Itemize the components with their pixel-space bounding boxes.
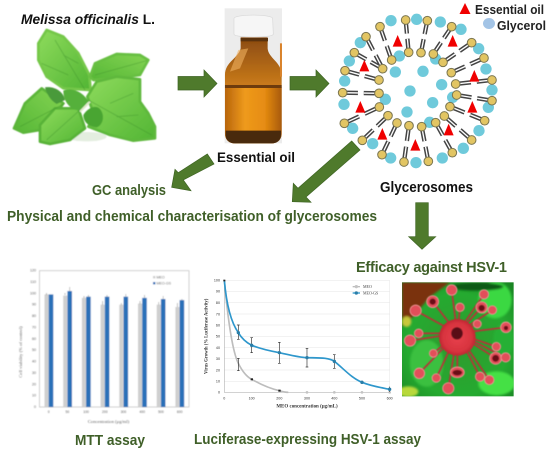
chart legend: MEO xyxy=(156,276,165,280)
bar chart: MTT cell viability: 90 xyxy=(32,303,36,307)
icon: lemon balm leaves xyxy=(14,30,155,144)
bar chart: MTT cell viability: 500 xyxy=(158,410,164,414)
heading: Luciferase-expressing HSV-1 assay: Luciferase-expressing HSV-1 assay xyxy=(194,432,421,448)
arrow: oil to GC analysis xyxy=(172,154,214,191)
bar chart: MTT cell viability: 50 xyxy=(66,410,69,414)
bar chart: MTT cell viability: 10 xyxy=(32,394,36,398)
chart legend: MEO-GS xyxy=(363,290,378,295)
line chart: virus growth: 90 xyxy=(216,290,220,294)
line chart: virus growth: 70 xyxy=(216,312,220,316)
essential oil triangles xyxy=(355,35,479,151)
line chart: virus growth: MEO concentration (µg/mL) xyxy=(276,405,338,410)
line chart: virus growth: 80 xyxy=(216,301,220,305)
label: glycerosomes: Glycerosomes xyxy=(380,180,473,196)
MEO-GS curve xyxy=(224,280,390,389)
chart legend: MEO-GS xyxy=(156,282,172,286)
bar chart: MTT cell viability: 60 xyxy=(32,337,36,341)
bar chart: MTT cell viability: 40 xyxy=(32,360,36,364)
bar chart: MTT cell viability: 300 xyxy=(121,410,126,414)
line chart: virus growth: 30 xyxy=(216,357,220,361)
gray MEO bars xyxy=(44,294,179,407)
line chart: virus growth: 500 xyxy=(359,396,365,400)
glycerol molecules xyxy=(338,14,498,168)
chart legend xyxy=(353,284,378,295)
line chart: virus growth: Virus Growth (% Luciferase Activity) xyxy=(204,298,209,374)
bar chart: MTT cell viability: 600 xyxy=(177,410,183,414)
virus body xyxy=(439,319,476,356)
line chart: virus growth: 100 xyxy=(249,396,255,400)
legend: essential oil and glycerol: Glycerol xyxy=(497,19,546,33)
heading: efficacy against HSV-1: Efficacy against HSV-1 xyxy=(356,260,507,276)
legend: essential oil and glycerol xyxy=(460,3,546,33)
virus spikes xyxy=(410,290,506,388)
MEO curve xyxy=(224,280,288,392)
bar chart: MTT cell viability: 200 xyxy=(102,410,108,414)
arrow: oil to glycerosomes xyxy=(290,70,329,97)
bar chart: MTT cell viability: 110 xyxy=(30,280,36,284)
heading: physical and chemical characterisation: Physical and chemical characterisation of glycerosomes xyxy=(7,208,377,225)
bar chart: MTT cell viability: 70 xyxy=(32,325,36,329)
bar chart: MTT cell viability: 30 xyxy=(32,371,36,375)
legend: essential oil and glycerol: Essential oil xyxy=(475,3,544,17)
bar chart: MTT cell viability: 400 xyxy=(139,410,145,414)
virus spike tips xyxy=(404,285,511,394)
bar chart: MTT cell viability: 0 xyxy=(48,410,50,414)
line chart: virus growth: 400 xyxy=(331,396,337,400)
bar chart: MTT cell viability: 100 xyxy=(30,291,36,295)
bar chart: MTT cell viability: 0 xyxy=(34,405,36,409)
bar chart: MTT cell viability: Cell viability (% of control) xyxy=(18,326,23,378)
bar chart: MTT cell viability: 120 xyxy=(30,269,36,273)
line chart: virus growth: 300 xyxy=(304,396,310,400)
icon: amber essential oil bottle xyxy=(225,8,282,143)
heading: MTT assay: MTT assay xyxy=(75,433,145,449)
error bars xyxy=(237,325,390,392)
line chart: virus growth: 10 xyxy=(216,380,220,384)
phospholipid heads xyxy=(338,16,496,166)
bar chart: MTT cell viability: 20 xyxy=(32,382,36,386)
line chart: virus growth: 100 xyxy=(214,279,220,283)
image: red virus particle on green background xyxy=(398,282,515,397)
bar chart: MTT cell viability: 50 xyxy=(32,348,36,352)
arrow: leaves to oil xyxy=(178,70,217,97)
chart legend: MEO xyxy=(363,284,372,289)
line chart: virus growth: 50 xyxy=(216,335,220,339)
line chart: virus growth xyxy=(204,279,393,410)
line chart: virus growth: 0 xyxy=(218,391,220,395)
chart legend xyxy=(153,276,172,286)
arrow: glycerosomes to efficacy xyxy=(409,203,436,249)
bar chart: MTT cell viability: Concentration (µg/ml) xyxy=(88,419,130,424)
heading: GC analysis: GC analysis xyxy=(92,183,166,199)
plant name heading: Melissa officinalis L. xyxy=(21,12,155,27)
line chart: virus growth: 600 xyxy=(387,396,393,400)
line chart: virus growth: 40 xyxy=(216,346,220,350)
line chart: virus growth: 60 xyxy=(216,323,220,327)
line chart: virus growth: 0 xyxy=(223,396,225,400)
diagram: glycerosome vesicle xyxy=(338,14,498,168)
line chart: virus growth: 200 xyxy=(276,396,282,400)
line chart: virus growth: 20 xyxy=(216,368,220,372)
bar chart: MTT cell viability: 100 xyxy=(83,410,89,414)
arrow: glycerosomes to characterisation xyxy=(292,141,360,202)
blue MEO-GS bars xyxy=(49,291,184,407)
bar chart: MTT cell viability: 80 xyxy=(32,314,36,318)
label: essential oil: Essential oil xyxy=(217,150,295,165)
bar chart: MTT cell viability xyxy=(18,269,189,424)
